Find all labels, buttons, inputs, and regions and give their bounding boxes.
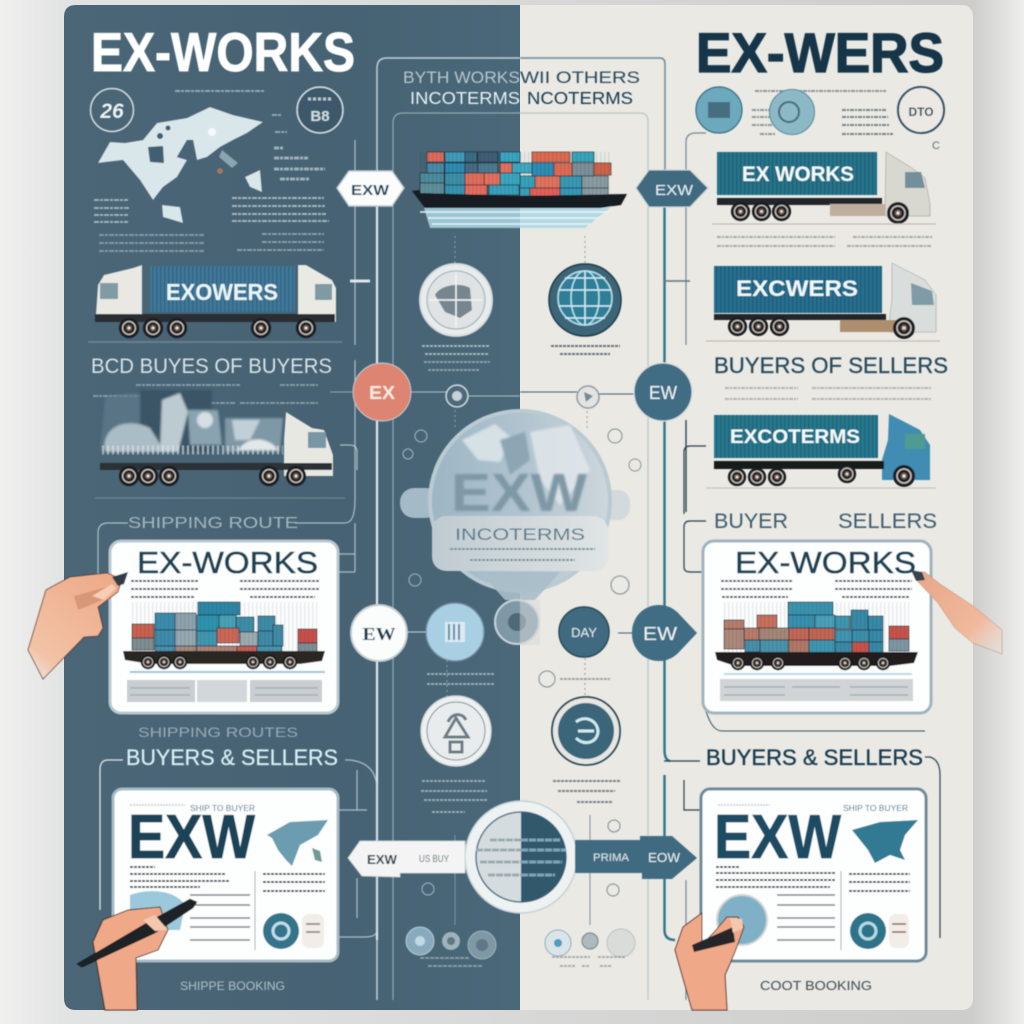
circle EW dark right: EW: [649, 383, 677, 403]
right cab: [298, 265, 336, 322]
circle EW right drop: EW: [643, 624, 677, 644]
badge icon: [263, 913, 299, 949]
circle EW right drop: [632, 605, 697, 661]
left world map: [98, 107, 263, 223]
cab: [284, 412, 333, 476]
grey footer band: [720, 679, 913, 701]
card: exw right: SHIP TO BUYER: [843, 804, 908, 813]
circle EX coral: EX: [369, 383, 395, 403]
stacked containers: [132, 602, 317, 661]
right heading: buyer sellers: BUYER: [714, 510, 788, 533]
card: ex-works left: EX-WORKS: [137, 545, 318, 580]
center frames and connectors: [98, 58, 940, 1000]
mini map: [267, 820, 328, 866]
right truck 1: EX WORKS: [742, 163, 854, 186]
right truck 1: [717, 152, 930, 224]
circle EW dark right: [634, 363, 692, 421]
hexagon EXW left: [337, 171, 404, 206]
card text lines: [131, 581, 320, 597]
left stat circles: [90, 87, 343, 133]
globe icon left: [420, 264, 492, 336]
lens handle: [480, 572, 560, 600]
right heading: buyer sellers: SELLERS: [838, 510, 937, 533]
left heading: buyers and sellers: BUYERS & SELLERS: [126, 745, 338, 770]
ring icon under lens: [495, 600, 540, 645]
badge icon: [850, 913, 886, 949]
stacked containers: [724, 602, 909, 653]
right stat circles: DTO: [908, 105, 934, 119]
circle icon dark: DAY: [571, 625, 597, 640]
left heading: shipping faint: SHIPPING ROUTE: [128, 515, 298, 532]
card: exw left: SHIP TO BUYER: [190, 804, 255, 813]
left title: EX-WORKS: [91, 21, 355, 83]
card: ex-works left: [110, 541, 338, 713]
header: incoterms left half: INCOTERMS: [410, 88, 520, 108]
header: incoterms left half: BYTH WORKS: [403, 68, 520, 87]
right footer text: COOT BOOKING: [760, 979, 872, 993]
containers: [420, 152, 611, 196]
right caption text lines: [717, 91, 932, 399]
card: ex-works right: EX-WORKS: [735, 545, 916, 580]
medal icon left: [421, 696, 491, 766]
left heading: buyers of buyers: BCD BUYES OF BUYERS: [91, 355, 332, 378]
left caption text lines: [93, 91, 329, 403]
panel: light right half: [520, 5, 973, 1010]
circle EW left: [351, 605, 407, 661]
panel: dark left half: [64, 5, 520, 1010]
right heading: buyers and sellers: BUYERS & SELLERS: [706, 745, 923, 770]
card: exw right: [701, 789, 926, 961]
left truck 1: [95, 265, 336, 338]
medal icon right: [552, 697, 620, 765]
grey footer band: [127, 680, 195, 702]
article lines: [130, 867, 325, 891]
hand with pen right: [675, 913, 744, 1010]
left stat circles: B8: [310, 108, 330, 125]
arrow EXW right: PRIMA: [593, 852, 630, 864]
right stat circles: [696, 87, 944, 152]
small node icons: [403, 385, 641, 594]
card: exw left: [113, 789, 338, 961]
right truck 2: EXCWERS: [736, 276, 858, 301]
hexagon EXW left: EXW: [351, 182, 390, 199]
arrow EXW left: EXW: [367, 852, 398, 867]
caption under icons: [427, 674, 610, 684]
globe captions: [422, 346, 620, 370]
right stat circles: C: [932, 140, 940, 152]
hand with pen left: [77, 899, 197, 1010]
header: incoterms right half: [520, 68, 640, 108]
medal captions: [421, 781, 620, 812]
arrow EXW left: [348, 841, 465, 877]
right heading: buyers of sellers: BUYERS OF SELLERS: [714, 353, 948, 378]
right truck 3 blue cab: EXCOTERMS: [730, 427, 860, 448]
mini map: [852, 820, 918, 863]
container: [150, 266, 295, 312]
arrow EXW right: [575, 836, 697, 879]
circle icon dark: [559, 607, 609, 657]
hand right holding card: [911, 570, 1002, 654]
left cab: [96, 265, 142, 314]
cargo ship: [412, 152, 627, 228]
left truck 2 with ghost cargo: [100, 390, 333, 486]
left footer text: SHIPPE BOOKING: [180, 979, 285, 993]
bottom small icons right: [545, 820, 635, 966]
circle EW left: EW: [362, 624, 396, 644]
arrow EXW left: US BUY: [419, 854, 449, 865]
right truck 3 blue cab: [714, 414, 930, 487]
card text lines: [721, 581, 912, 597]
article lines: [716, 867, 910, 891]
right truck 2: [714, 263, 936, 339]
left heading: shipping routes faint: SHIPPING ROUTES: [138, 724, 298, 740]
circle EX coral: [353, 363, 411, 421]
card: exw right: EXW: [714, 803, 841, 872]
hexagon EXW right: [636, 170, 708, 207]
header: incoterms right half: WII OTHERS: [520, 68, 640, 87]
right heading: buyer sellers: [714, 510, 937, 533]
arrow EXW right: EOW: [648, 850, 681, 865]
circle icon blue: [426, 603, 484, 661]
lens label EXW: EXW: [451, 463, 587, 523]
left truck 1: EXOWERS: [166, 279, 278, 305]
globe icon right: [549, 264, 621, 336]
header: incoterms right half: NCOTERMS: [527, 88, 633, 108]
magnifier lower: [465, 801, 577, 913]
bottom small icons left: [406, 883, 496, 966]
central magnifier lens: INCOTERMS: [455, 525, 585, 544]
card: exw left: EXW: [128, 803, 255, 872]
lens band: [432, 516, 608, 571]
central magnifier lens: [400, 411, 630, 600]
hand left holding card: [28, 572, 128, 679]
left stat circles: 26: [99, 100, 124, 123]
card: ex-works right: [703, 541, 931, 713]
header: incoterms left half: [403, 68, 520, 108]
hexagon EXW right: EXW: [655, 182, 694, 199]
right title: EX-WERS: [696, 21, 944, 84]
